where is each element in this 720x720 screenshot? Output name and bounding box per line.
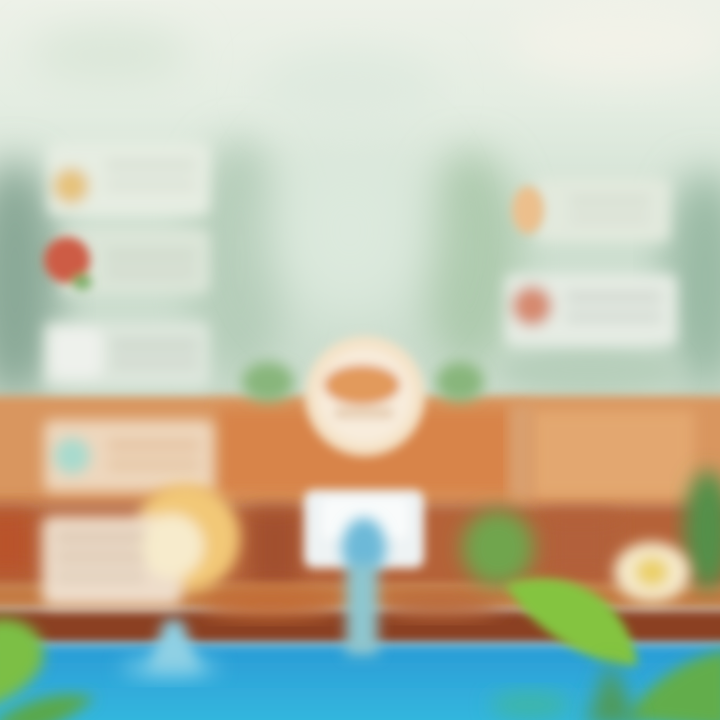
water tank box (304, 490, 424, 568)
panel: left card 2 (60, 228, 210, 294)
waterfall left (148, 620, 200, 670)
panel: left card 1 (48, 142, 210, 216)
panel: right card 1 (535, 178, 670, 242)
icon: pale square (50, 328, 102, 378)
panel: left card 5 with yellow circle (42, 484, 240, 606)
center badge (305, 336, 425, 456)
brick wall (0, 396, 720, 644)
background: misty foliage (0, 0, 720, 410)
large leaf foreground (505, 578, 720, 720)
leaves bottom left (0, 619, 95, 720)
panel: left card 4 (44, 420, 214, 492)
icon: teal circle (53, 437, 91, 475)
plant far right (684, 470, 720, 590)
green plant center right (462, 510, 534, 586)
icon: red fruit (44, 237, 92, 290)
water stream (342, 518, 386, 655)
water pool (0, 644, 720, 720)
panel: right card 2 (505, 274, 677, 346)
small plants on wall (242, 362, 484, 402)
egg icon right (614, 542, 690, 602)
icon: red circle (512, 286, 552, 326)
icon: orange oval (512, 186, 544, 234)
icon: orange circle (53, 168, 89, 204)
panel: left card 3 (44, 322, 209, 388)
